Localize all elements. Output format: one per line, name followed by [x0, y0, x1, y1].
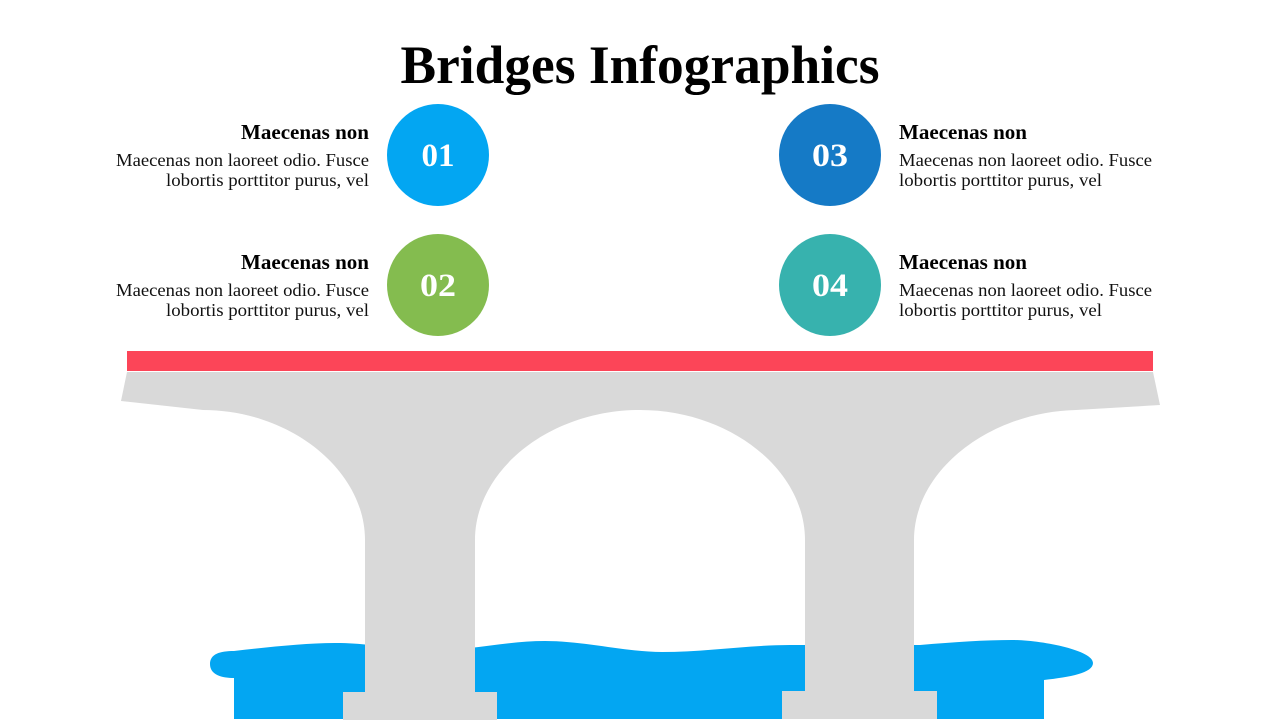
item 01 body text: lobortis porttitor purus, vel [166, 170, 369, 190]
item 03 number circle: 03 [812, 138, 848, 174]
item 02 heading: Maecenas non [241, 250, 369, 274]
item 02 [116, 234, 489, 336]
item 03 number circle [779, 104, 881, 206]
item 01 body text [116, 150, 369, 190]
item 03 [779, 104, 1152, 206]
item 03 heading: Maecenas non [899, 120, 1027, 144]
item 04 heading: Maecenas non [899, 250, 1027, 274]
item 01 number circle: 01 [422, 138, 454, 174]
road deck [127, 351, 1153, 371]
item 03 body text [899, 150, 1152, 190]
bridge [121, 372, 1160, 720]
item 04 number circle: 04 [812, 268, 848, 304]
item 02 number circle: 02 [420, 268, 456, 304]
item 02 number circle [387, 234, 489, 336]
item 03 body text: Maecenas non laoreet odio. Fusce [899, 150, 1152, 170]
item 04 body text: lobortis porttitor purus, vel [899, 300, 1102, 320]
item 01 [116, 104, 489, 206]
item 01 body text: Maecenas non laoreet odio. Fusce [116, 150, 369, 170]
item 04 number circle [779, 234, 881, 336]
item 01 heading: Maecenas non [241, 120, 369, 144]
item 02 body text: Maecenas non laoreet odio. Fusce [116, 280, 369, 300]
water [210, 640, 1093, 719]
item 02 body text: lobortis porttitor purus, vel [166, 300, 369, 320]
item 02 body text [116, 280, 369, 320]
item 03 body text: lobortis porttitor purus, vel [899, 170, 1102, 190]
item 04 [779, 234, 1152, 336]
item 01 number circle [387, 104, 489, 206]
item 04 body text: Maecenas non laoreet odio. Fusce [899, 280, 1152, 300]
title: Bridges Infographics [400, 35, 880, 95]
item 04 body text [899, 280, 1152, 320]
